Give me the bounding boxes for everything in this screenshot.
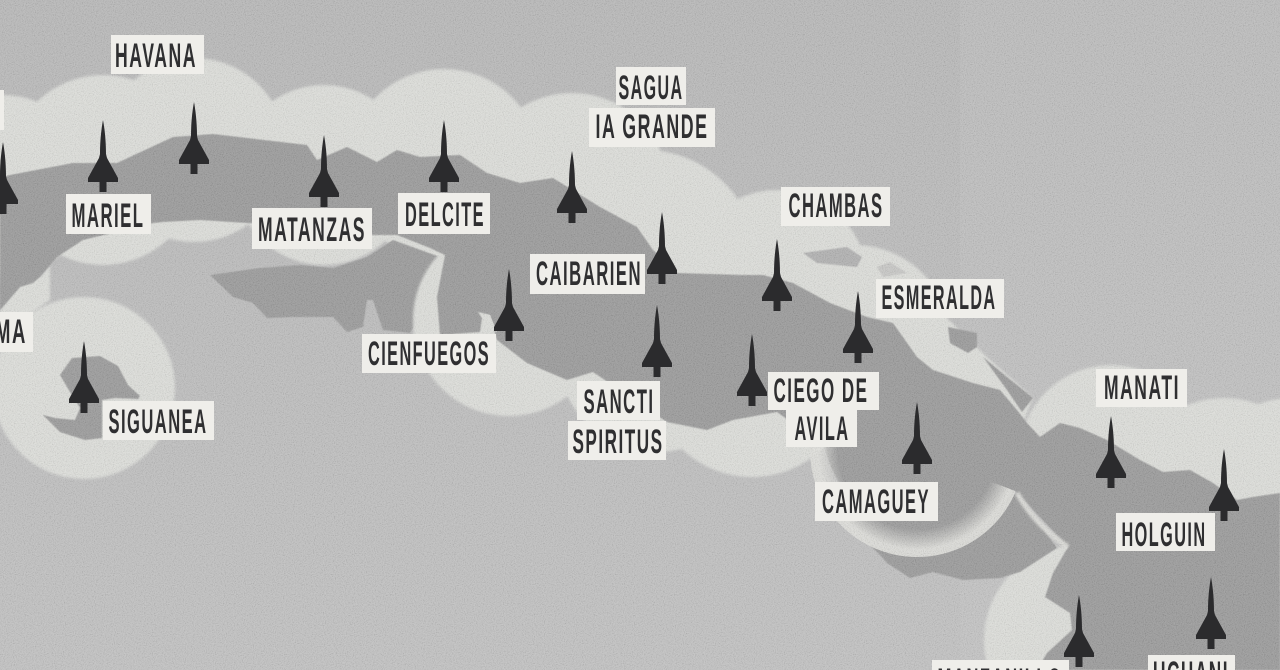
place labels: SAGUA — [618, 69, 684, 107]
label: Sancti — [577, 381, 660, 421]
label: Delcite — [398, 193, 490, 234]
label: Matanzas — [252, 208, 372, 249]
Cienfuegos range circle — [413, 224, 605, 416]
missile: Manzanillo — [1064, 595, 1094, 667]
land: main island of Cuba — [0, 134, 1280, 670]
label: Mariel: MARIEL — [72, 197, 144, 235]
Holguin range rim — [1017, 493, 1068, 547]
label: Esmeralda — [876, 279, 1004, 318]
missile: Ciego de Avila — [737, 334, 767, 406]
label: Ciego de — [768, 372, 879, 410]
missile: Delcite — [429, 120, 459, 192]
missile: Havana — [179, 102, 209, 174]
label: Chambas: CHAMBAS — [788, 187, 884, 225]
missile: Mariel — [88, 120, 118, 192]
label: Manati: MANATI — [1104, 369, 1180, 407]
label: Siguanea: SIGUANEA — [108, 403, 208, 441]
label: Manzanillo (cropped) — [932, 660, 1069, 670]
label: Delcite: DELCITE — [405, 196, 485, 234]
label: Sancti: SANCTI — [584, 383, 654, 421]
label: Caibarien: CAIBARIEN — [536, 255, 642, 293]
missile: Sagua la Grande — [557, 151, 587, 223]
label: Holguin — [1116, 513, 1215, 554]
label: Ciego de: CIEGO DE — [774, 372, 868, 410]
label: Spiritus: SPIRITUS — [572, 423, 664, 461]
label: Siguanea — [103, 401, 214, 441]
label: Uchani (cropped) — [1148, 655, 1235, 670]
missile: Sancti Spiritus — [642, 305, 672, 377]
label: Mariel — [66, 194, 151, 235]
label: Avila: AVILA — [794, 410, 850, 448]
label: Manati — [1096, 369, 1187, 407]
land: southern peninsula — [210, 240, 440, 333]
missile: Manati — [1096, 416, 1126, 488]
label: Spiritus — [568, 421, 666, 461]
missile: Matanzas — [309, 135, 339, 207]
label: Esmeralda: ESMERALDA — [882, 279, 996, 317]
label: Havana — [111, 35, 204, 75]
missile: far west — [0, 142, 18, 214]
label: Matanzas: MATANZAS — [258, 211, 366, 249]
label: partial Pinar del Rio — [0, 312, 33, 352]
label: sliver at edge — [0, 90, 4, 130]
map: land masses — [43, 240, 1057, 580]
label: Caibarien — [530, 254, 645, 294]
label: Avila — [786, 410, 857, 448]
label: la Grande — [589, 108, 715, 147]
land: eastern cays — [948, 327, 1033, 412]
missile: Cienfuegos — [494, 269, 524, 341]
label: Cienfuegos: CIENFUEGOS — [368, 335, 490, 373]
land: south coast below Camaguey — [847, 493, 1057, 580]
label: Cienfuegos — [362, 334, 496, 373]
missile: Siguanea — [69, 341, 99, 413]
missile: Esmeralda — [843, 291, 873, 363]
label: Chambas — [781, 187, 890, 226]
missile: Uchani — [1196, 577, 1226, 649]
label: Camaguey: CAMAGUEY — [822, 483, 930, 521]
missile: Caibarien — [647, 212, 677, 284]
land: Isle of Pines — [43, 356, 140, 440]
Camaguey range rim — [810, 447, 1015, 557]
label: Camaguey — [815, 482, 938, 521]
missile: Chambas — [762, 239, 792, 311]
background: lighter right sheet — [960, 0, 1280, 670]
label: la Grande: IA GRANDE — [596, 108, 708, 146]
cays in the northern halo — [803, 247, 907, 277]
missile: Camaguey — [902, 402, 932, 474]
Cienfuegos bay highlight — [480, 313, 497, 332]
label: Sagua — [616, 67, 686, 107]
label: Havana: HAVANA — [115, 37, 197, 75]
missile: Holguin — [1209, 449, 1239, 521]
